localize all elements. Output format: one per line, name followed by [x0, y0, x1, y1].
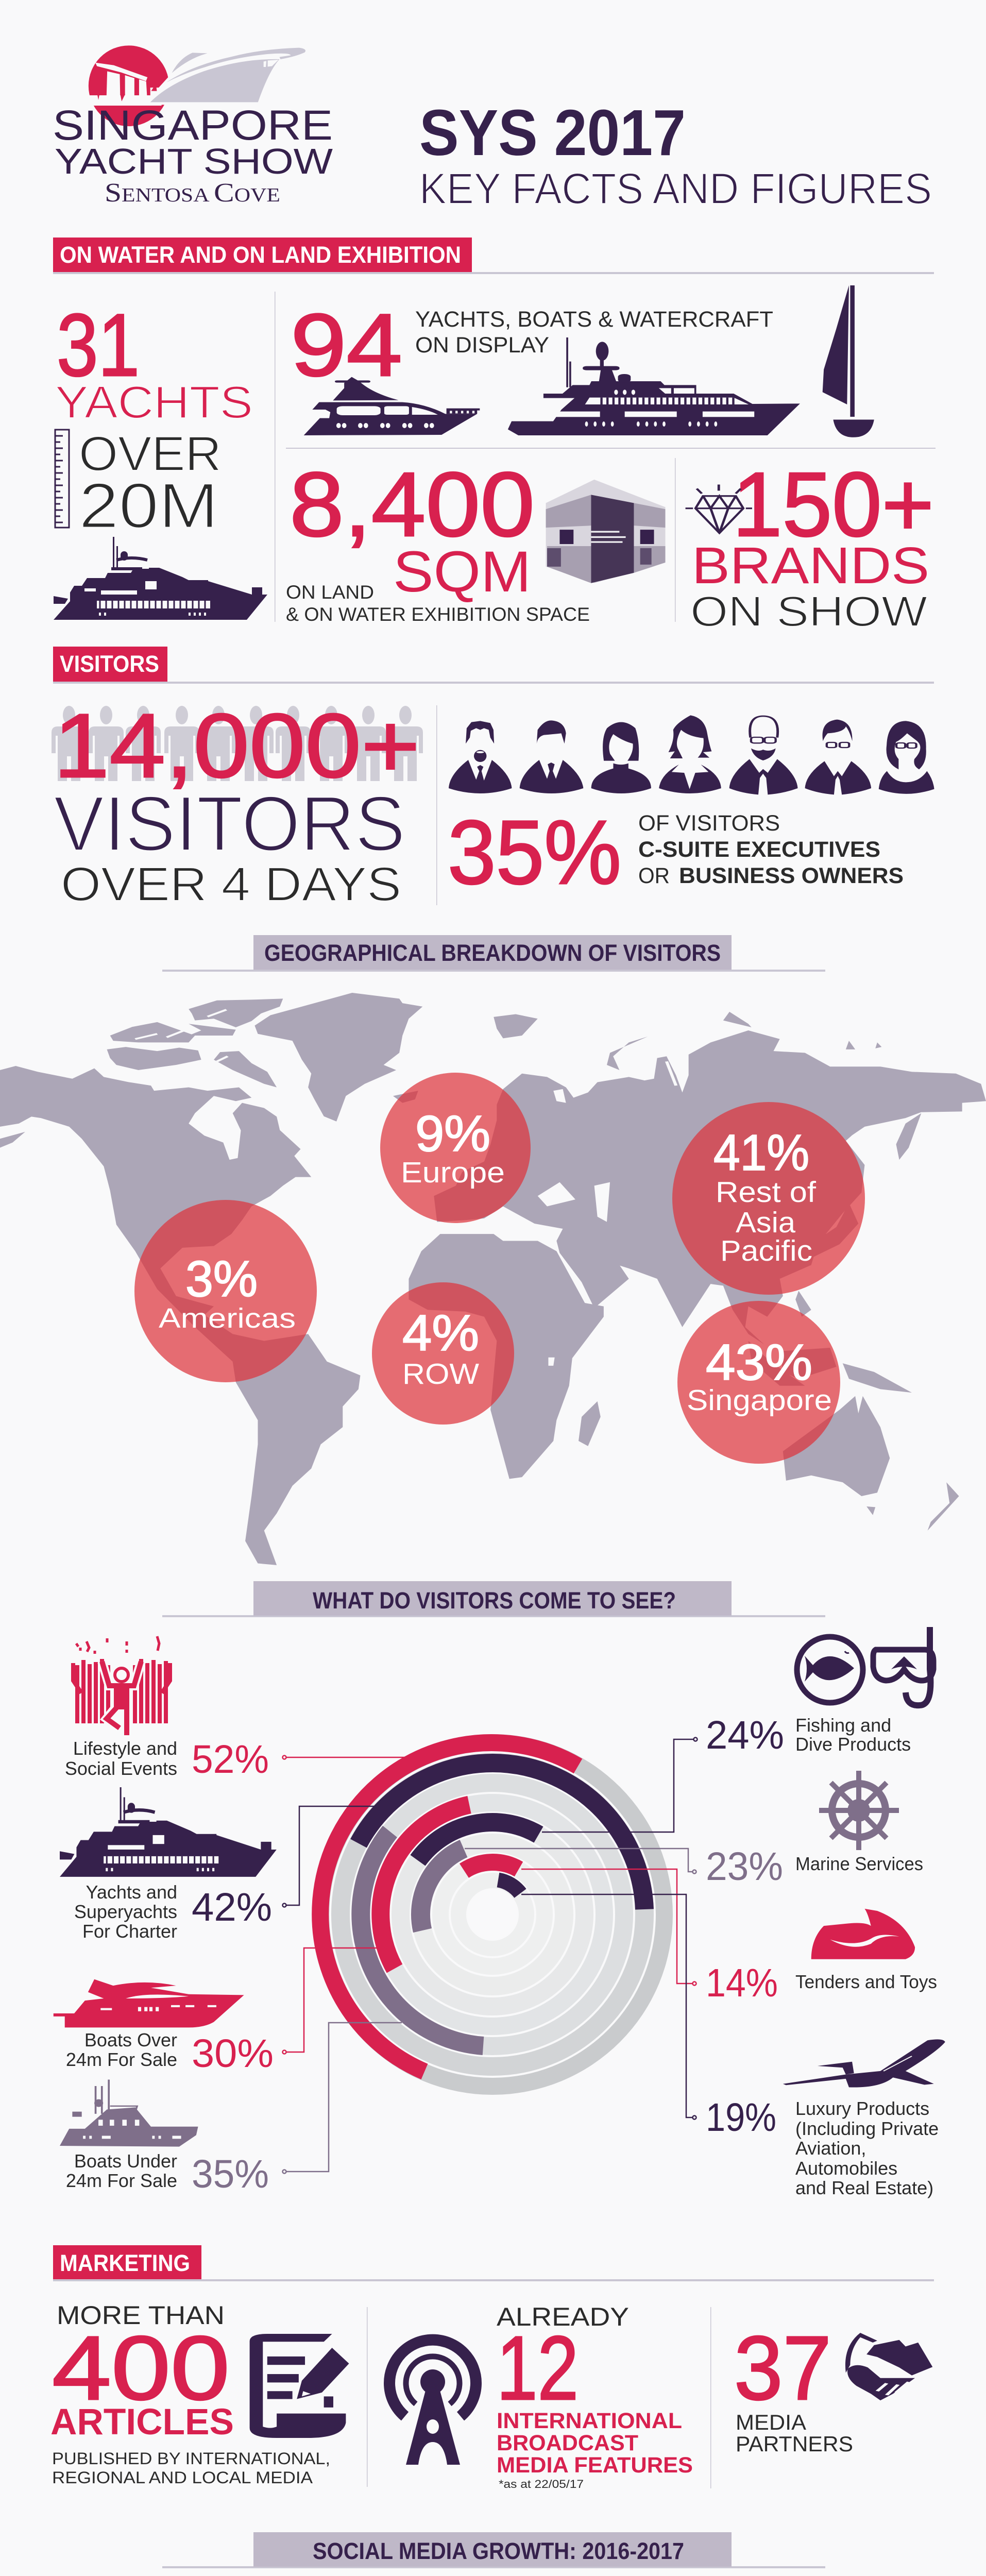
item: tenders 14%	[706, 1961, 937, 2005]
item: luxury products 19%: and Real Estate)	[795, 2177, 933, 2198]
stat: 14,000+ visitors: VISITORS	[54, 780, 405, 868]
icon: executives	[449, 715, 934, 794]
bubble: rest of asia pacific 41%: Asia	[736, 1206, 795, 1239]
icon: document and pencil	[250, 2334, 349, 2438]
item: boats under 24m 35%: 35%	[192, 2152, 269, 2196]
item: boats under 24m 35%: Boats Under	[74, 2150, 177, 2172]
item: marine services 23%: 23%	[706, 1844, 783, 1889]
item: yachts for charter 42%: For Charter	[82, 1921, 177, 1942]
section heading	[162, 935, 825, 972]
stat: 14,000+ visitors	[54, 696, 420, 911]
item: yachts for charter 42%	[74, 1882, 272, 1942]
title	[419, 96, 932, 213]
bubble: row 4%: 4%	[402, 1304, 479, 1361]
stat: 400 articles: ARTICLES	[50, 2402, 234, 2443]
section heading	[53, 2245, 934, 2281]
stat: 150+ brands: BRANDS	[692, 537, 929, 595]
item: luxury products 19%: 19%	[706, 2095, 776, 2140]
icon: grey boat	[60, 2080, 198, 2147]
item: boats under 24m 35%: 24m For Sale	[66, 2170, 177, 2191]
logo wordmark: SINGAPORE	[53, 102, 333, 149]
stat: 150+ brands	[690, 453, 934, 635]
stat: 8,400 sqm: ON LAND	[286, 582, 374, 603]
stat: 31 yachts: 20M	[79, 470, 218, 541]
bubble: europe 9%: 9%	[415, 1105, 490, 1162]
bubble: rest of asia pacific 41%: 41%	[713, 1124, 809, 1181]
stat: 94 yachts on display	[291, 296, 773, 395]
item: marine services 23%	[706, 1844, 923, 1889]
section heading: MARKETING	[60, 2250, 190, 2276]
section heading: ON WATER AND ON LAND EXHIBITION	[60, 242, 461, 268]
item: lifestyle 52%	[65, 1737, 269, 1782]
world map	[0, 993, 986, 1565]
stat: 150+ brands: ON SHOW	[690, 587, 928, 635]
section heading: SOCIAL MEDIA GROWTH: 2016-2017	[313, 2538, 684, 2564]
item: yachts for charter 42%: Yachts and	[86, 1882, 177, 1903]
stat: 12 broadcast features: *as at 22/05/17	[499, 2478, 584, 2490]
stat: 8,400 sqm	[286, 453, 590, 625]
item: yachts for charter 42%: 42%	[192, 1885, 272, 1929]
icon: ruler	[55, 430, 69, 528]
bubble: singapore 43%: 43%	[706, 1334, 812, 1391]
icon: handshake	[845, 2333, 932, 2400]
stat: 400 articles: 400	[52, 2318, 230, 2419]
bubble: row 4%	[372, 1282, 514, 1425]
icon: party crowd	[73, 1636, 170, 1735]
stat: 8,400 sqm: & ON WATER EXHIBITION SPACE	[286, 604, 590, 625]
section heading	[162, 1581, 825, 1617]
item: tenders 14%: 14%	[706, 1961, 778, 2005]
icon: broadcast antenna	[389, 2340, 476, 2465]
stat: 35% executives	[448, 802, 904, 903]
stat: 37 media partners: MEDIA	[736, 2410, 806, 2434]
item: boats over 24m 30%	[66, 2029, 274, 2076]
stat: 150+ brands: 150+	[733, 453, 934, 555]
stat: 31 yachts	[55, 296, 253, 541]
bubble: americas 3%	[134, 1200, 317, 1382]
icon: large superyacht	[508, 337, 800, 435]
stat: 400 articles	[50, 2301, 330, 2487]
stat: 12 broadcast features: MEDIA FEATURES	[497, 2453, 693, 2478]
icon: jet ski	[811, 1909, 915, 1959]
logo	[53, 45, 333, 208]
stat: 94 yachts on display: ON DISPLAY	[415, 333, 549, 358]
stat: 94 yachts on display: 94	[291, 296, 402, 395]
panel: what do visitors come to see	[54, 1581, 945, 2198]
item: fishing 24%: Dive Products	[795, 1734, 911, 1755]
stat: 31 yachts: 31	[57, 296, 140, 395]
section heading: VISITORS	[60, 651, 159, 677]
logo mark	[87, 45, 305, 126]
icon: charter superyacht	[60, 1787, 277, 1877]
section heading	[53, 238, 934, 274]
bubble: singapore 43%	[677, 1301, 840, 1464]
item: lifestyle 52%: Lifestyle and	[73, 1738, 177, 1759]
icon: red motor boat	[54, 1979, 244, 2027]
section heading	[162, 2532, 825, 2568]
radial bar chart	[312, 1734, 673, 2095]
stat: 94 yachts on display: YACHTS, BOATS & WATERCRAFT	[415, 307, 773, 332]
panel: on water and on land exhibition	[53, 238, 936, 635]
item: tenders 14%: Tenders and Toys	[795, 1971, 937, 1992]
panel: visitors	[52, 647, 934, 911]
item: lifestyle 52%: Social Events	[65, 1758, 177, 1779]
item: boats under 24m 35%	[66, 2150, 269, 2196]
bubble: rest of asia pacific 41%: Pacific	[720, 1234, 812, 1267]
stat: 35% executives: BUSINESS OWNERS	[679, 863, 904, 888]
logo wordmark	[53, 102, 333, 208]
stat: 37 media partners: PARTNERS	[736, 2432, 853, 2456]
icon: motor yacht	[304, 377, 480, 435]
item: luxury products 19%: (Including Private	[795, 2118, 939, 2139]
section heading: GEOGRAPHICAL BREAKDOWN OF VISITORS	[264, 940, 721, 966]
panel: social media growth	[54, 2532, 932, 2576]
stat: 12 broadcast features: BROADCAST	[497, 2431, 638, 2455]
bubble: americas 3%: Americas	[159, 1303, 296, 1334]
icon: ship wheel	[819, 1771, 899, 1850]
stat: 14,000+ visitors: OVER 4 DAYS	[61, 857, 401, 911]
logo wordmark: SENTOSA COVE	[105, 178, 280, 208]
panel: geographical breakdown	[0, 935, 986, 1565]
item: fishing 24%: 24%	[706, 1713, 784, 1757]
stat: 12 broadcast features: 12	[497, 2318, 579, 2419]
stat: 12 broadcast features: ALREADY	[497, 2302, 629, 2331]
logo wordmark: YACHT SHOW	[55, 141, 333, 181]
item: marine services 23%: Marine Services	[795, 1853, 923, 1874]
stat: 37 media partners: 37	[734, 2318, 831, 2419]
stat: 12 broadcast features	[497, 2302, 693, 2490]
icon: diamond	[686, 484, 752, 533]
item: luxury products 19%: Aviation,	[795, 2138, 866, 2159]
bubble: rest of asia pacific 41%	[672, 1102, 865, 1295]
item: luxury products 19%	[706, 2095, 939, 2198]
title: KEY FACTS AND FIGURES	[419, 164, 932, 213]
stat: 12 broadcast features: INTERNATIONAL	[497, 2409, 682, 2433]
section heading: WHAT DO VISITORS COME TO SEE?	[313, 1587, 676, 1614]
icon: sailboat	[823, 285, 874, 437]
icon: fish and dive mask	[797, 1627, 933, 1705]
bubble: europe 9%: Europe	[401, 1156, 505, 1189]
stat: 35% executives: 35%	[448, 802, 621, 903]
stat: 400 articles: MORE THAN	[57, 2301, 225, 2330]
stat: 37 media partners	[734, 2318, 853, 2456]
panel: marketing	[50, 2245, 934, 2490]
bubble: row 4%: ROW	[402, 1358, 479, 1391]
item: yachts for charter 42%: Superyachts	[74, 1901, 177, 1922]
item: boats over 24m 30%: Boats Over	[84, 2029, 177, 2050]
item: luxury products 19%: Luxury Products	[795, 2098, 929, 2119]
stat: 31 yachts: OVER	[79, 427, 222, 481]
stat: 400 articles: PUBLISHED BY INTERNATIONAL,	[52, 2449, 330, 2468]
stat: 14,000+ visitors: 14,000+	[54, 696, 420, 796]
stat: 35% executives: OF VISITORS	[638, 811, 780, 836]
item: fishing 24%	[706, 1713, 911, 1757]
leader lines	[282, 1737, 698, 2173]
stat: 35% executives: C-SUITE EXECUTIVES	[638, 837, 880, 862]
stat: 400 articles: REGIONAL AND LOCAL MEDIA	[52, 2468, 313, 2487]
stat: 8,400 sqm: 8,400	[290, 453, 535, 555]
icon: superyacht	[54, 537, 267, 620]
bubble: rest of asia pacific 41%: Rest of	[716, 1176, 816, 1209]
section heading	[53, 647, 934, 684]
bubble: americas 3%: 3%	[185, 1250, 258, 1307]
stat: 35% executives: OR	[638, 863, 670, 888]
stat: 8,400 sqm: SQM	[393, 539, 531, 604]
bubble: europe 9%	[380, 1073, 531, 1223]
bubble: singapore 43%: Singapore	[687, 1384, 832, 1417]
icon: private jet	[783, 2039, 945, 2088]
item: luxury products 19%: Automobiles	[795, 2158, 897, 2179]
icon: crowd of visitors	[52, 706, 423, 781]
item: lifestyle 52%: 52%	[192, 1737, 269, 1782]
title: SYS 2017	[419, 96, 686, 169]
item: boats over 24m 30%: 24m For Sale	[66, 2049, 177, 2070]
item: fishing 24%: Fishing and	[795, 1715, 891, 1736]
item: boats over 24m 30%: 30%	[192, 2031, 274, 2076]
icon: exhibition building	[546, 480, 666, 583]
stat: 31 yachts: YACHTS	[55, 377, 253, 428]
